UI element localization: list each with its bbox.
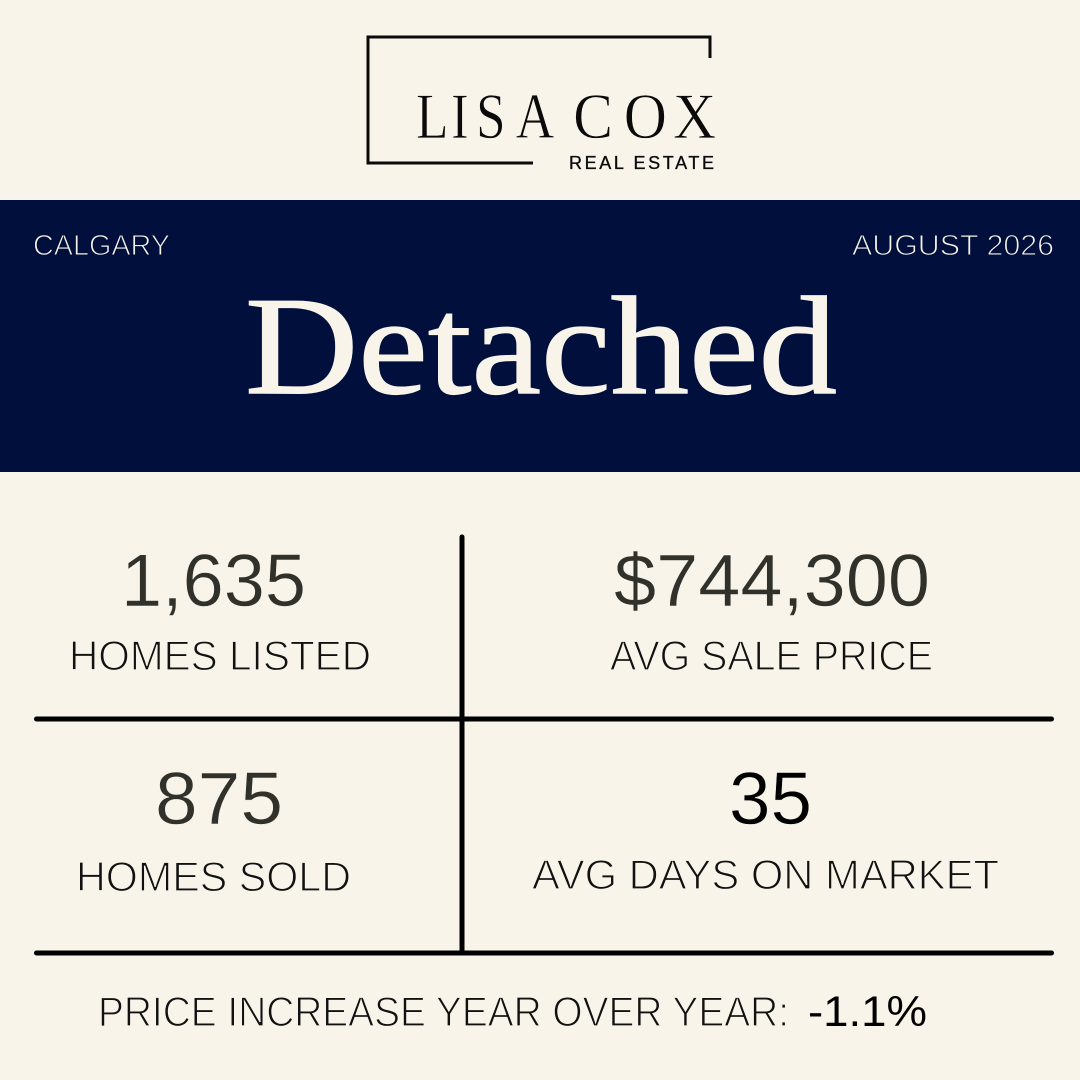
footer: year over year price change: PRICE INCREASE YEAR OVER YEAR: (98, 988, 789, 1035)
header band (0, 200, 1080, 472)
logo wordmark: LISA (416, 80, 554, 152)
stat: average days on market (532, 757, 999, 898)
location label: CALGARY (33, 230, 170, 262)
stat: average sale price: AVG SALE PRICE (610, 632, 933, 679)
title: Detached (245, 269, 837, 424)
stat: homes listed (69, 539, 371, 679)
stat: homes sold (76, 757, 351, 900)
stat: homes listed: 1,635 (121, 539, 306, 622)
logo frame (368, 37, 710, 163)
stat: homes listed: HOMES LISTED (69, 632, 371, 679)
stats grid lines (36, 537, 1052, 953)
stat: average days on market: AVG DAYS ON MARKET (532, 851, 999, 898)
stat: homes sold: HOMES SOLD (76, 853, 351, 900)
logo: Lisa Cox Real Estate (368, 37, 716, 173)
stat: homes sold: 875 (155, 757, 283, 840)
stat: average sale price (610, 539, 933, 679)
logo subtitle: REAL ESTATE (569, 153, 714, 173)
stat: average days on market: 35 (729, 757, 812, 840)
stat: average sale price: $744,300 (614, 539, 930, 622)
date label: AUGUST 2026 (852, 230, 1054, 262)
price change value: -1.1% (808, 988, 927, 1036)
logo wordmark second word: COX (573, 80, 716, 153)
